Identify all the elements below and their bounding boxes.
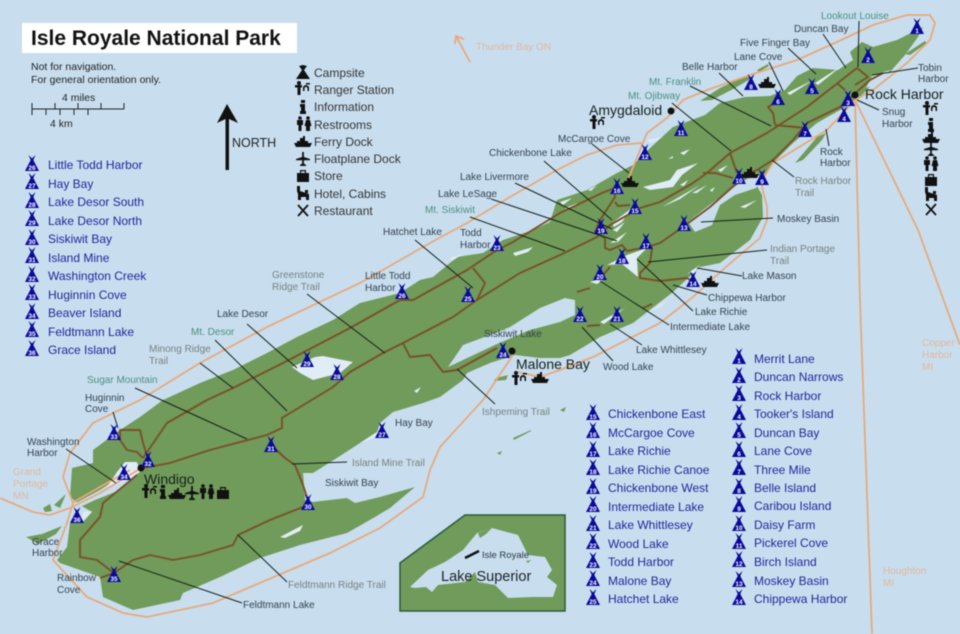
map labels: Harbor [922,350,953,361]
map labels: Mt. Franklin [649,77,701,88]
map labels: Windigo [144,471,195,487]
campsite list: west: Little Todd Harbor [48,158,143,172]
campsite markers on map: 30 [304,504,312,511]
campsite markers on map: 3 [846,100,850,107]
map labels: Rock Harbor [865,86,944,102]
map labels: Snug [882,107,905,118]
title: Isle Royale National Park [31,27,281,50]
north arrow: NORTH [232,136,276,150]
campsite key [296,65,365,80]
campsite list: west: 27 [28,183,36,190]
icons: Windigo services [142,484,229,500]
campsite list: central: 19 [589,488,597,495]
map labels: Cove [57,585,81,596]
map labels: Ridge Trail [272,282,320,293]
map labels: Mt. Desor [191,327,235,338]
map labels: Trail [795,188,814,199]
campsite list: west: 32 [28,276,36,283]
map labels: Five Finger Bay [740,38,810,49]
map labels: Harbor [460,240,491,251]
campsite list: east: Three Mile [754,463,811,477]
campsite markers on map: 20 [596,274,604,281]
campsite list: east: Rock Harbor [754,389,821,403]
campsite list: west: Island Mine [48,251,110,265]
campsite list: east: Duncan Narrows [754,370,843,384]
campsite markers on map: 13 [680,225,688,232]
map labels: Feldtmann Ridge Trail [288,580,386,591]
map labels: Trail [149,356,168,367]
campsite markers on map: 19 [597,228,605,235]
outer islands [795,133,826,163]
map labels: MN [13,491,29,502]
floatplane dock key: Floatplane Dock [314,152,402,166]
campsite list: east: Moskey Basin [754,574,829,588]
campsite markers on map: 21 [613,316,621,323]
campsite list: central: 23 [589,562,597,569]
campsite list: central: 15 [589,414,597,421]
campsite list: east: Tooker's Island [754,407,834,421]
restrooms key [297,116,372,132]
campsite list: central: 22 [589,543,597,550]
campsite list: east: Birch Island [754,555,817,569]
scale bar [32,92,124,130]
map labels: Houghton [883,566,926,577]
town dots [138,92,858,472]
campsite list: west: 26 [28,165,36,172]
campsite markers on map: 7 [803,131,807,138]
campsite list: east: 6 [737,451,741,458]
campsite markers on map: 15 [631,208,639,215]
campsite list: central: 21 [589,525,597,532]
map labels: Siskiwit Bay [325,478,378,489]
campsite list: west: Grace Island [48,343,116,357]
campsite markers on map: 24 [499,352,507,359]
scale bar: 4 km [50,118,73,130]
map labels: Mt. Ojibway [628,91,680,102]
map labels: Belle Harbor [682,62,738,73]
map labels: Lake Mason [742,271,796,282]
store key: Store [314,169,343,183]
campsite list: east: Duncan Bay [754,426,819,440]
campsite list: central: Lake Richie [608,444,671,458]
map labels: Rock [820,147,844,158]
map labels: MI [922,362,933,373]
campsite markers on map: 9 [760,179,764,186]
campsite list: west: 33 [28,294,36,301]
amenity icons on map [142,77,940,500]
campsite list: west: Feldtmann Lake [48,325,134,339]
campsite markers on map: 11 [678,130,685,137]
map labels: Sugar Mountain [87,375,158,386]
service legend [294,65,402,218]
icons: Rock Harbor services [922,101,940,215]
map labels: Chickenbone Lake [489,148,572,159]
map labels: McCargoe Cove [558,134,631,145]
store key [297,169,343,183]
campsite list: west: Washington Creek [48,269,147,283]
campsite markers on map: 17 [642,243,650,250]
title [22,23,297,53]
campsite list: east: 4 [737,414,741,421]
campsite markers on map: 6 [776,99,780,106]
campsite list: west: Hay Bay [48,177,93,191]
campsite list: east: Pickerel Cove [754,536,828,550]
campsite list: central: Lake Richie Canoe [608,463,710,477]
map labels: Mt. Siskiwit [425,205,475,216]
campsite list: central: Chickenbone West [608,481,709,495]
map labels: Amygdaloid [589,102,662,118]
map labels: Harbor [27,448,58,459]
map labels: Harbor [882,119,913,130]
campsite list: east: Chippewa Harbor [754,592,847,606]
campsite list: central: Wood Lake [608,537,669,551]
map labels: Cove [85,404,109,415]
inset map: Lake Superior [400,515,565,611]
campsite list: west: 34 [28,313,36,320]
map labels: Chippewa Harbor [708,293,786,304]
campsite list: central: Todd Harbor [608,555,674,569]
campsite list: central: Malone Bay [608,574,671,588]
campsite list: east: 5 [737,432,741,439]
map labels: Intermediate Lake [670,322,750,333]
campsite list: west: 30 [28,239,36,246]
map labels: Rock Harbor [795,176,852,187]
campsite list: central: 17 [589,451,597,458]
campsite markers on map: 18 [618,258,626,265]
scale bar: 4 miles [62,92,95,104]
campsite list: east: Lane Cove [754,444,812,458]
map labels: Tobin [918,63,942,74]
campsite list: west: Beaver Island [48,306,121,320]
map labels: Thunder Bay ON [476,42,551,53]
map labels: Harbor [820,158,851,169]
campsite list: east: Belle Island [754,481,816,495]
campsite list: east: 11 [736,543,743,550]
map labels: Hay Bay [395,418,433,429]
restrooms key: Restrooms [314,118,372,132]
campsite markers on map: 22 [576,316,584,323]
campsite list: central: 18 [589,469,597,476]
map labels: MI [883,578,894,589]
map labels: Lake Desor [217,309,269,320]
inset map: Lake Superior: Lake Superior [441,569,531,585]
map labels: Lake Richie [695,307,748,318]
campsite markers on map: 5 [810,88,814,95]
campsite markers on map: 26 [398,293,406,300]
campsite markers on map: 12 [641,154,649,161]
water inlets and lakes [72,65,890,538]
campsite markers on map: 36 [73,517,81,524]
campsite list: west: Siskiwit Bay [48,232,112,246]
map labels: Harbor [918,74,949,85]
information key: Information [314,100,374,114]
campsite list: west: 28 [28,202,36,209]
campsite markers on map: 1 [915,28,919,35]
campsite markers on map: 4 [842,116,846,123]
campsite markers on map: 33 [110,434,118,441]
map labels: Wood Lake [603,362,654,373]
campsite markers on map: 2 [866,57,870,64]
campsite markers on map: 32 [144,461,152,468]
campsite key: Campsite [314,66,365,80]
campsite list: east: 10 [735,525,743,532]
campsite list: central: Hatchet Lake [608,592,679,606]
campsite list: east: 8 [737,488,741,495]
map labels: Grand [13,467,41,478]
map labels: Portage [13,479,48,490]
campsite list: west: Lake Desor North [48,214,142,228]
campsite markers on map [70,18,924,583]
campsite list: east: 13 [735,581,743,588]
campsite list: central: 16 [589,432,597,439]
campsite list: west: Lake Desor South [48,195,144,209]
map labels: Rainbow [57,573,97,584]
ranger station key: Ranger Station [314,83,394,97]
ferry dock key: Ferry Dock [314,135,374,149]
map labels: Trail [770,256,789,267]
map labels: Moskey Basin [777,214,839,225]
map labels: Harbor [365,283,396,294]
disclaimer note: For general orientation only. [31,74,161,86]
campsite markers on map: 14 [689,281,697,288]
campsite list: central [586,404,710,606]
map labels: Greenstone [272,270,325,281]
map labels: Lake Whittlesey [636,345,707,356]
icon: ferry docks [621,77,776,287]
campsite list: central: 25 [589,599,597,606]
map labels: Huginnin [85,393,124,404]
campsite list: central: McCargoe Cove [608,426,695,440]
campsite list: west: Huginnin Cove [48,288,127,302]
campsite list: west: 35 [28,331,36,338]
campsite markers on map: 8 [749,84,753,91]
campsite list: central: 20 [589,506,597,513]
disclaimer note [31,61,161,86]
map labels: Harbor [32,548,63,559]
campsite list: central: Lake Whittlesey [608,518,693,532]
campsite markers on map: 28 [333,374,341,381]
map labels: Ishpeming Trail [482,407,550,418]
campsite list: east: 2 [737,377,741,384]
campsite list: east: Caribou Island [754,499,831,513]
campsite list: east: 1 [737,358,741,365]
campsite list: central: Intermediate Lake [608,500,704,514]
campsite markers on map: 31 [267,446,275,453]
arrow: route to Thunder Bay [455,36,470,62]
map labels: Copper [922,338,955,349]
map labels: Hatchet Lake [383,227,442,238]
map labels: Lake Livermore [460,172,529,183]
campsite list: central: 24 [589,580,597,587]
campsite markers on map: 16 [613,188,621,195]
hotel key: Hotel, Cabins [314,187,386,201]
campsite markers on map: 25 [464,296,472,303]
campsite list: central: Chickenbone East [608,407,706,421]
map labels: Todd [460,228,482,239]
campsite list: west [25,155,147,357]
campsite markers on map: 10 [735,178,743,185]
campsite markers on map: 23 [493,245,501,252]
inset map: Lake Superior: Isle Royale [482,550,529,561]
trails [80,68,883,578]
map labels: Indian Portage [770,244,835,255]
campsite list: east: 7 [737,469,741,476]
map labels: Little Todd [365,271,410,282]
campsite list: east: Daisy Farm [754,518,815,532]
campsite list: east: 14 [735,599,743,606]
map labels: Grace [32,537,60,548]
icons: Malone Bay [512,371,549,385]
campsite list: west: 36 [28,350,36,357]
campsite markers on map: 34 [120,474,128,481]
map labels: Washington [27,437,79,448]
icons: Amygdaloid ranger [590,115,605,129]
map labels: Lookout Louise [821,11,889,22]
map labels: Minong Ridge [149,344,211,355]
restaurant key: Restaurant [314,204,373,218]
north arrow [217,104,276,170]
campsite list: east: Merrit Lane [754,352,815,366]
disclaimer note: Not for navigation. [31,61,116,73]
campsite list: east: 3 [737,395,741,402]
campsite markers on map: 27 [378,432,386,439]
campsite list: west: 31 [28,257,36,264]
map labels: Siskiwit Lake [484,329,542,340]
map labels: Malone Bay [516,356,590,372]
map labels: Lane Cove [734,52,783,63]
map labels: Lake LeSage [438,189,497,200]
campsite list: east: 12 [735,561,743,568]
map labels: Feldtmann Lake [243,600,315,611]
campsite list: west: 29 [28,220,36,227]
map labels: Island Mine Trail [352,458,425,469]
campsite list: east: 9 [737,506,741,513]
campsite list: east [732,348,847,606]
map labels: Duncan Bay [794,24,848,35]
campsite markers on map: 35 [110,576,118,583]
campsite markers on map: 29 [303,361,311,368]
